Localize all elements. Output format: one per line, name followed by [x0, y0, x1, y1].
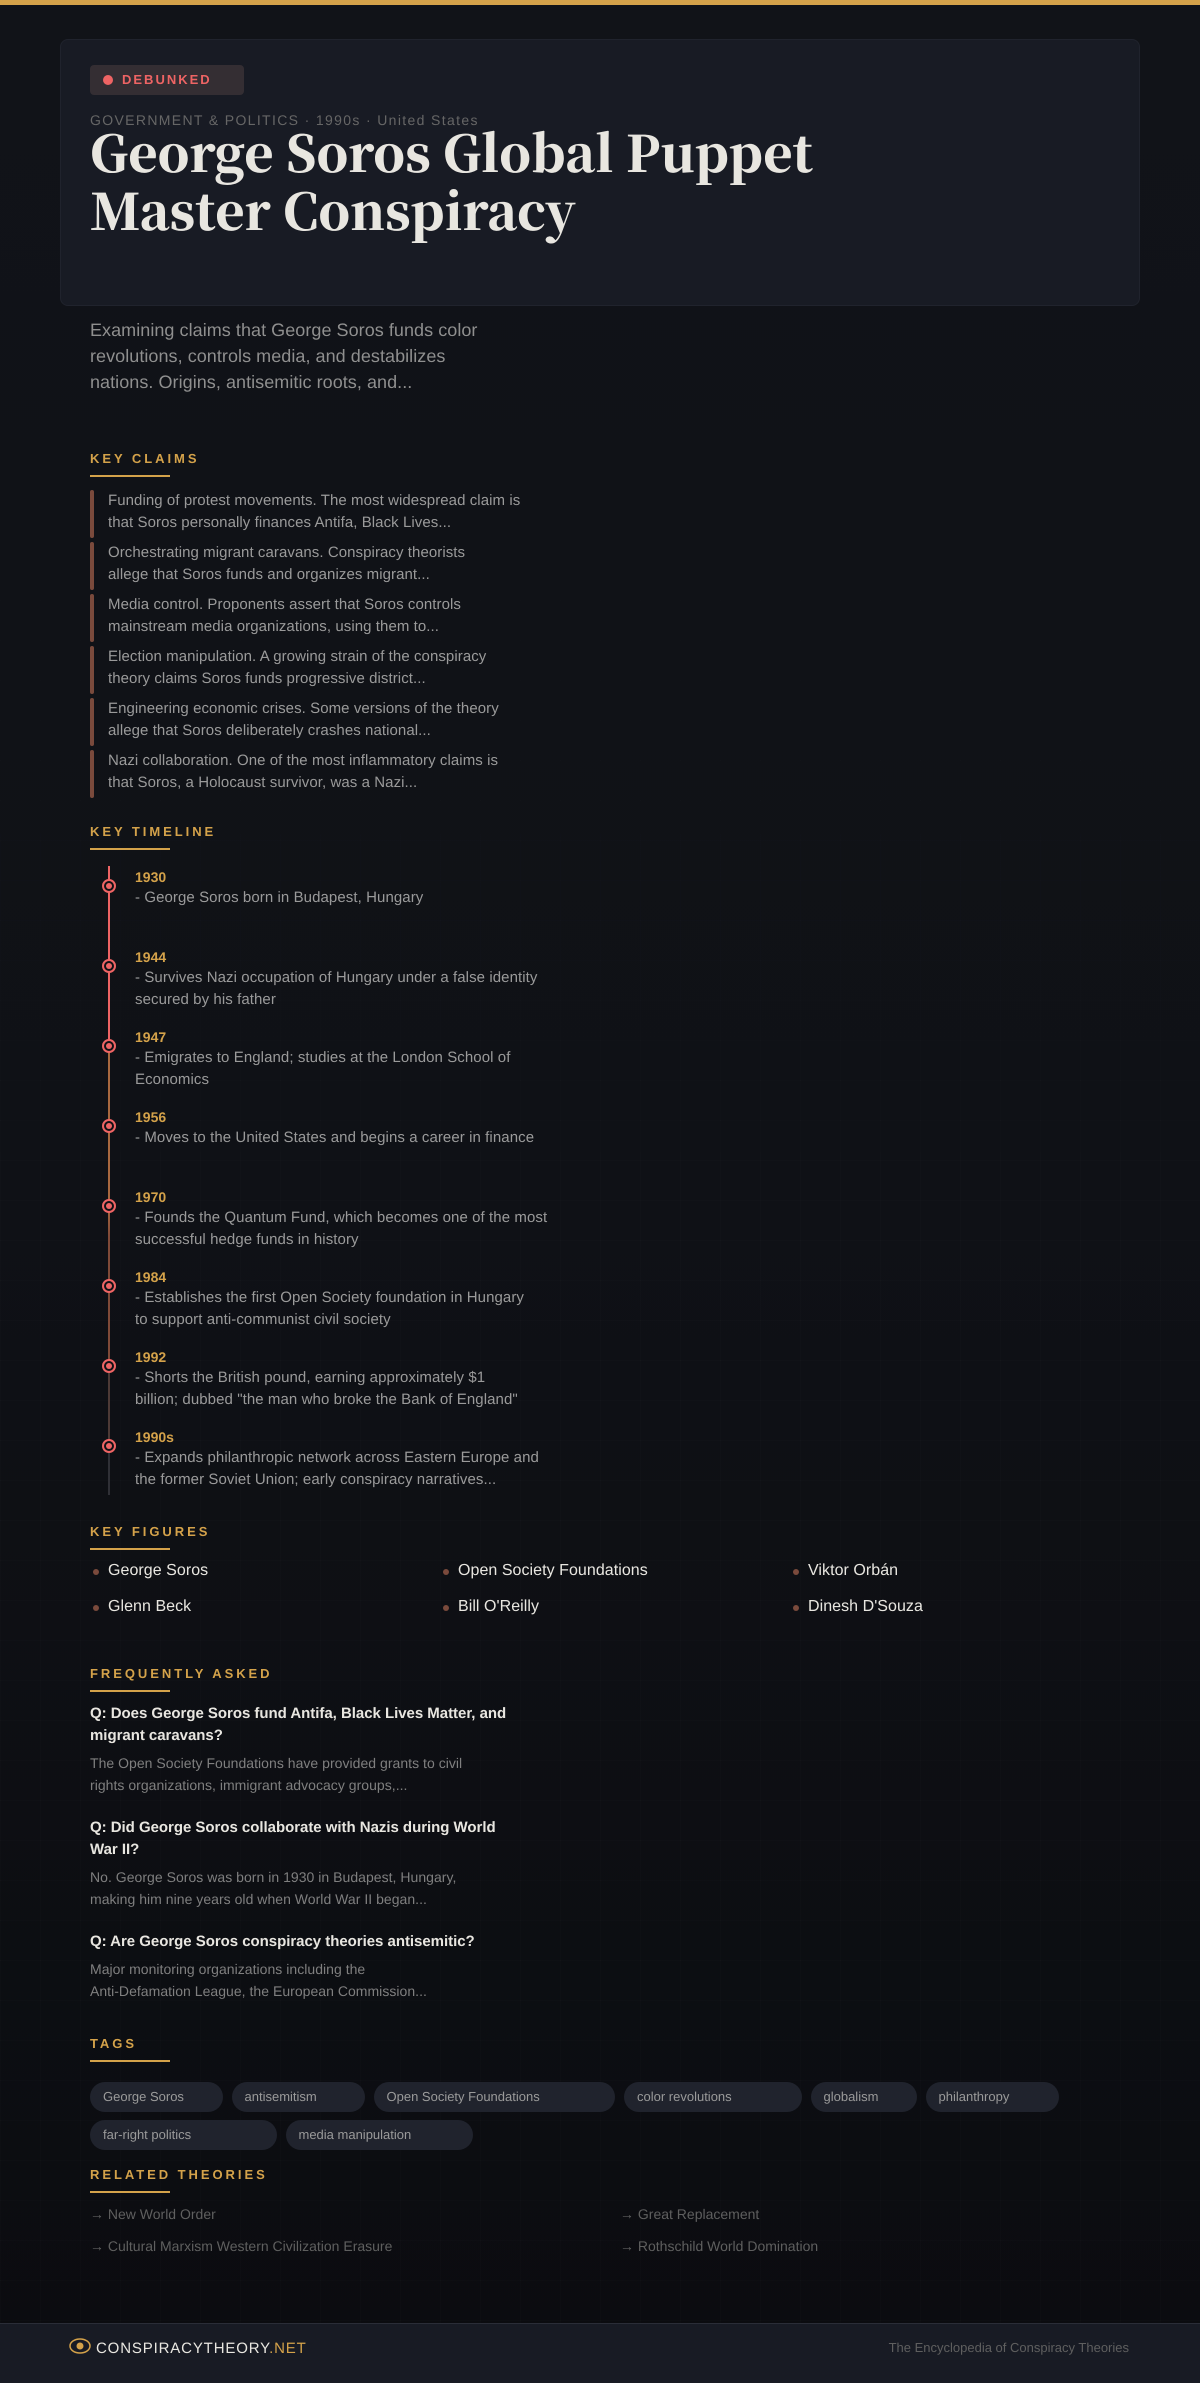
- claim 2: allege that Soros funds and organizes migrant...: [108, 566, 430, 583]
- heading: key timeline: KEY TIMELINE: [90, 824, 216, 839]
- title: [90, 115, 813, 245]
- tag: antisemitism: [244, 2089, 317, 2104]
- claim 4: [90, 646, 486, 694]
- heading: related theories: RELATED THEORIES: [90, 2167, 268, 2182]
- claim 5: [90, 698, 499, 746]
- timeline spine: [108, 866, 110, 1495]
- event 1990s: 1990s: [135, 1429, 174, 1445]
- figure: Glenn Beck: Glenn Beck: [108, 1598, 191, 1615]
- event 1930: 1930: [135, 869, 166, 885]
- claim 4: theory claims Soros funds progressive district...: [108, 670, 426, 687]
- claim 6: that Soros, a Holocaust survivor, was a Nazi...: [108, 774, 417, 791]
- event 1984: [135, 1269, 524, 1328]
- figure: Dinesh D'Souza: Dinesh D'Souza: [808, 1598, 923, 1615]
- event 1984: to support anti-communist civil society: [135, 1311, 391, 1328]
- related link: → Great Replacement: [620, 2206, 759, 2222]
- event 1990s: [135, 1429, 539, 1488]
- heading: frequently asked: FREQUENTLY ASKED: [90, 1666, 273, 1681]
- question 1: migrant caravans?: [90, 1727, 223, 1744]
- tag: philanthropy: [938, 2089, 1009, 2104]
- node 1970: [102, 1199, 116, 1213]
- node 1990s: [102, 1439, 116, 1453]
- event 1944: secured by his father: [135, 991, 276, 1008]
- icon: eye logo: [69, 2338, 91, 2354]
- tag: Open Society Foundations: [386, 2089, 540, 2104]
- timeline: [102, 866, 548, 1495]
- tag: media manipulation: [298, 2127, 411, 2142]
- panel: key figures: [93, 1562, 923, 1615]
- claim 1: that Soros personally finances Antifa, Black Lives...: [108, 514, 451, 531]
- event 1947: [135, 1029, 510, 1088]
- question 3: Q: Are George Soros conspiracy theories antisemitic?: [90, 1933, 475, 1950]
- node 1947: [102, 1039, 116, 1053]
- event 1944: 1944: [135, 949, 166, 965]
- tag: [926, 2082, 1058, 2112]
- event 1944: - Survives Nazi occupation of Hungary under a false identity: [135, 969, 538, 986]
- answer 2: No. George Soros was born in 1930 in Budapest, Hungary,: [90, 1869, 456, 1885]
- claim 3: [90, 594, 461, 642]
- question 1: [90, 1705, 506, 1744]
- summary text: nations. Origins, antisemitic roots, and...: [90, 372, 412, 392]
- claim 1: Funding of protest movements. The most widespread claim is: [108, 492, 520, 509]
- answer 3: Anti-Defamation League, the European Commission...: [90, 1983, 427, 1999]
- question 2: War II?: [90, 1841, 139, 1858]
- event 1970: successful hedge funds in history: [135, 1231, 359, 1248]
- summary text: revolutions, controls media, and destabilizes: [90, 346, 445, 366]
- event 1944: [135, 949, 538, 1008]
- event 1990s: - Expands philanthropic network across Eastern Europe and: [135, 1449, 539, 1466]
- heading: key figures: KEY FIGURES: [90, 1524, 210, 1539]
- title: Master Conspiracy: [90, 173, 576, 245]
- claim 2: [90, 542, 465, 590]
- figure: Viktor Orbán: Viktor Orbán: [808, 1562, 898, 1579]
- answer 3: [90, 1961, 427, 1999]
- panel: tags: [90, 2082, 1059, 2150]
- answer 3: Major monitoring organizations including the: [90, 1961, 365, 1977]
- claim 3: mainstream media organizations, using them to...: [108, 618, 439, 635]
- event 1992: billion; dubbed "the man who broke the Bank of England": [135, 1391, 518, 1408]
- node 1930: [102, 879, 116, 893]
- event 1984: - Establishes the first Open Society foundation in Hungary: [135, 1289, 524, 1306]
- claim 3: Media control. Proponents assert that Soros controls: [108, 596, 461, 613]
- related link: → Rothschild World Domination: [620, 2238, 818, 2254]
- tag: [286, 2120, 472, 2150]
- event 1956: - Moves to the United States and begins a career in finance: [135, 1129, 534, 1146]
- figure: Bill O'Reilly: Bill O'Reilly: [458, 1598, 539, 1615]
- event 1992: 1992: [135, 1349, 166, 1365]
- title: George Soros Global Puppet: [90, 115, 813, 187]
- event 1970: [135, 1189, 548, 1248]
- summary text: [90, 320, 478, 392]
- panel: FAQ: [90, 1705, 506, 1999]
- figure: Open Society Foundations: Open Society Foundations: [458, 1562, 648, 1579]
- footer: [0, 2323, 1200, 2383]
- figure: George Soros: George Soros: [108, 1562, 208, 1579]
- panel: related theories: [90, 2206, 818, 2254]
- badge: debunked: [90, 65, 244, 95]
- related link: → Cultural Marxism Western Civilization Erasure: [90, 2238, 392, 2254]
- claim 5: Engineering economic crises. Some versions of the theory: [108, 700, 499, 717]
- event 1947: - Emigrates to England; studies at the London School of: [135, 1049, 510, 1066]
- event 1930: [135, 869, 424, 906]
- node 1984: [102, 1279, 116, 1293]
- event 1990s: the former Soviet Union; early conspiracy narratives...: [135, 1471, 496, 1488]
- answer 2: making him nine years old when World War II began...: [90, 1891, 427, 1907]
- event 1956: 1956: [135, 1109, 166, 1125]
- claim 6: [90, 750, 498, 798]
- answer 1: rights organizations, immigrant advocacy groups,...: [90, 1777, 407, 1793]
- claim 4: Election manipulation. A growing strain of the conspiracy: [108, 648, 486, 665]
- event 1992: - Shorts the British pound, earning approximately $1: [135, 1369, 485, 1386]
- icon: status dot: [103, 75, 113, 85]
- question 1: Q: Does George Soros fund Antifa, Black Lives Matter, and: [90, 1705, 506, 1722]
- badge label: DEBUNKED: [122, 72, 212, 87]
- claim 2: Orchestrating migrant caravans. Conspiracy theorists: [108, 544, 465, 561]
- tag: color revolutions: [637, 2089, 732, 2104]
- heading: key claims: KEY CLAIMS: [90, 451, 199, 466]
- node 1944: [102, 959, 116, 973]
- question 2: [90, 1819, 496, 1858]
- panel: hero: [60, 39, 1140, 306]
- tag: far-right politics: [103, 2127, 191, 2142]
- answer 1: [90, 1755, 462, 1793]
- tag: George Soros: [103, 2089, 184, 2104]
- event 1970: - Founds the Quantum Fund, which becomes one of the most: [135, 1209, 547, 1226]
- panel: key claims: [90, 490, 520, 798]
- tag: [232, 2082, 364, 2112]
- event 1984: 1984: [135, 1269, 166, 1285]
- event 1930: - George Soros born in Budapest, Hungary: [135, 889, 423, 906]
- footer tagline: The Encyclopedia of Conspiracy Theories: [889, 2340, 1129, 2355]
- tag: [624, 2082, 802, 2112]
- node 1992: [102, 1359, 116, 1373]
- question 2: Q: Did George Soros collaborate with Nazis during World: [90, 1819, 496, 1836]
- claim 1: [90, 490, 520, 538]
- tag: globalism: [824, 2089, 878, 2104]
- tag: [810, 2082, 916, 2112]
- claim 5: allege that Soros deliberately crashes national...: [108, 722, 431, 739]
- tag: [90, 2082, 223, 2112]
- answer 1: The Open Society Foundations have provided grants to civil: [90, 1755, 462, 1771]
- tag: [90, 2120, 277, 2150]
- top accent bar: [0, 0, 1200, 5]
- node 1956: [102, 1119, 116, 1133]
- event 1947: 1947: [135, 1029, 166, 1045]
- event 1992: [135, 1349, 518, 1408]
- claim 6: Nazi collaboration. One of the most inflammatory claims is: [108, 752, 498, 769]
- event 1970: 1970: [135, 1189, 166, 1205]
- answer 2: [90, 1869, 456, 1907]
- related link: → New World Order: [90, 2206, 216, 2222]
- summary text: Examining claims that George Soros funds color: [90, 320, 477, 340]
- event 1956: [135, 1109, 534, 1146]
- tag: [374, 2082, 614, 2112]
- category meta line: GOVERNMENT & POLITICS · 1990s · United States: [90, 112, 479, 128]
- logo wordmark: CONSPIRACYTHEORY.NET: [96, 2340, 307, 2357]
- event 1947: Economics: [135, 1071, 209, 1088]
- heading: tags: TAGS: [90, 2036, 137, 2051]
